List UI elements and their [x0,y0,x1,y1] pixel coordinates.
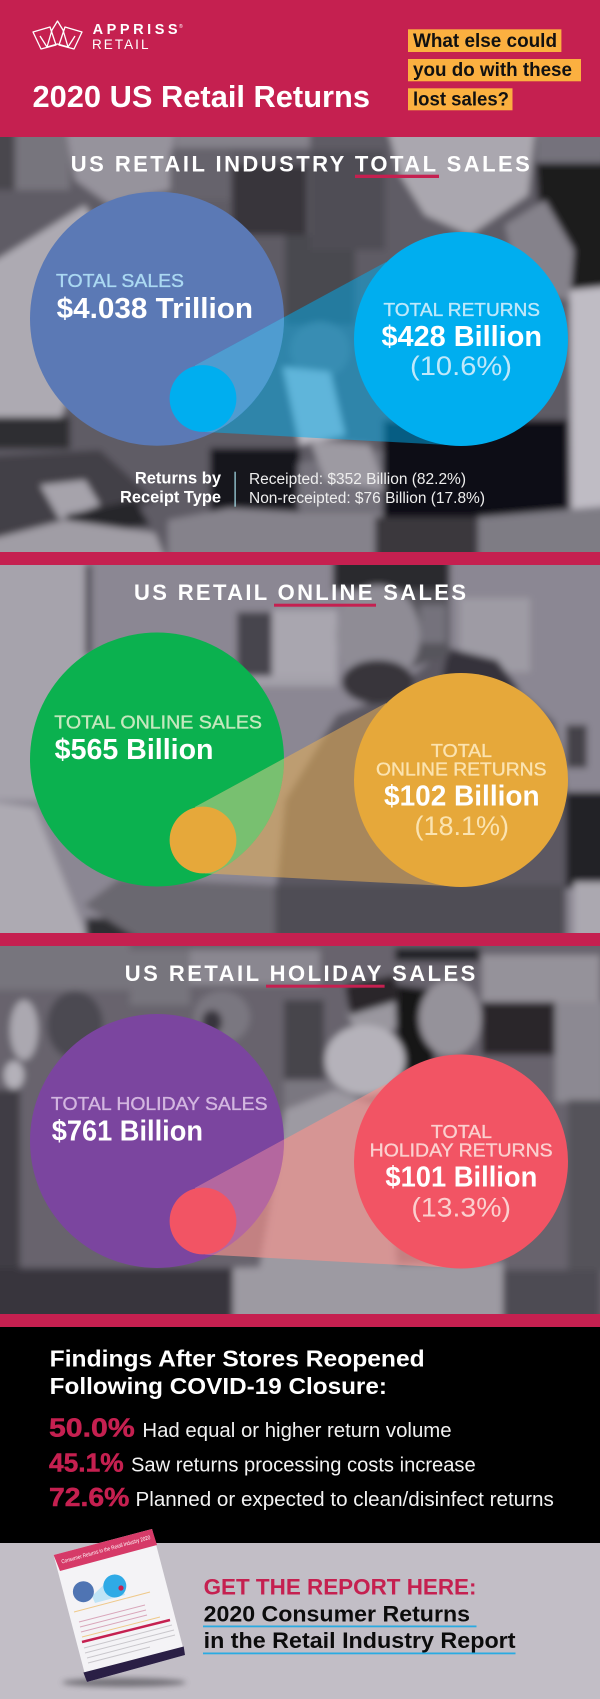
circle: total sales [30,192,284,446]
finding: clean and disinfect: 72.6% [49,1482,129,1512]
panel: get the report [0,1529,600,1699]
icon: report cover: Consumer Returns in the Retail Industry 2020 [61,1535,151,1565]
returns by receipt type: Non-receipted: $76 Billion (17.8%) [249,490,485,507]
icon: report cover [54,1529,186,1687]
call to action: 2020 Consumer Returns [204,1602,470,1627]
finding: clean and disinfect [49,1482,554,1512]
heading: findings: Following COVID-19 Closure: [50,1373,387,1399]
logo: Appriss Retail: ® [179,23,183,30]
finding: processing costs: 45.1% [49,1448,124,1478]
divider band [0,1314,600,1327]
circle: returns share [170,365,236,432]
heading: US RETAIL ONLINE SALES [134,580,466,605]
circle: total returns [354,232,568,446]
finding: clean and disinfect: Planned or expected to clean/disinfect returns [136,1489,554,1511]
header banner [0,0,600,137]
circle: holiday returns share [170,1188,236,1254]
label: total holiday returns: TOTAL [431,1121,492,1142]
label: total online returns: (18.1%) [414,811,509,841]
cone connector [195,703,448,886]
circle: online returns share [170,807,236,873]
circle: total holiday returns [354,1054,568,1268]
heading: US RETAIL HOLIDAY SALES [125,961,475,986]
circle: total holiday sales [30,1014,284,1268]
label: total returns: TOTAL RETURNS [384,299,540,320]
divider band [0,933,600,946]
heading: US RETAIL INDUSTRY TOTAL SALES [71,152,530,176]
call to action: GET THE REPORT HERE: [204,1574,476,1599]
panel: holiday sales [0,930,600,1330]
callout: what else could you do: What else could [413,31,557,52]
panel: total sales [0,120,600,570]
label: total returns: $428 Billion [382,321,542,353]
label: total online returns: $102 Billion [384,781,540,813]
finding: processing costs [49,1448,476,1478]
label: total holiday sales [51,1093,268,1148]
photo background: man at laptop [0,550,600,950]
panel: online sales [0,550,600,950]
title: 2020 US Retail Returns [32,79,370,114]
photo background: cashier scene [0,120,600,570]
finding: return volume: Had equal or higher return volume [142,1420,452,1442]
label: total holiday sales: $761 Billion [52,1116,203,1148]
label: total holiday returns: $101 Billion [385,1162,537,1194]
label: total holiday returns: (13.3%) [411,1193,511,1223]
call to action [203,1574,516,1654]
logo: Appriss Retail: APPRISS [93,22,178,38]
returns by receipt type: Receipt Type [120,489,221,507]
returns by receipt type: Returns by [135,469,222,487]
callout: what else could you do [408,29,581,110]
finding: return volume: 50.0% [49,1413,135,1443]
label: total online returns: TOTAL [431,740,492,761]
panel: findings [0,1327,600,1543]
label: total online sales: $565 Billion [55,734,214,766]
label: total returns: (10.6%) [410,351,512,381]
callout: what else could you do: lost sales? [413,90,509,110]
label: total online sales [54,711,262,766]
finding: return volume [49,1413,452,1443]
circle: total online sales [30,632,284,886]
label: total sales: $4.038 Trillion [57,293,253,325]
label: total returns [382,299,542,381]
photo background: holiday shopper in mask [0,930,600,1330]
finding: processing costs: Saw returns processing costs increase [131,1455,476,1477]
heading: findings [50,1346,425,1399]
callout: what else could you do: you do with these [413,60,572,81]
returns by receipt type [120,469,485,507]
label: total holiday sales: TOTAL HOLIDAY SALES [51,1093,268,1114]
label: total sales: TOTAL SALES [56,270,184,291]
label: total online sales: TOTAL ONLINE SALES [54,711,262,732]
icon: lotus crown [33,21,82,49]
call to action: in the Retail Industry Report [204,1628,516,1653]
cone connector [195,1084,448,1268]
circle: total online returns [354,673,568,887]
label: total sales [56,270,253,325]
returns by receipt type: Receipted: $352 Billion (82.2%) [249,471,466,488]
label: total holiday returns [370,1121,553,1223]
logo: Appriss Retail: RETAIL [92,37,149,52]
divider band [0,552,600,565]
label: total online returns [376,740,546,841]
logo: Appriss Retail [33,21,183,52]
cone connector [195,262,448,445]
label: total holiday returns: HOLIDAY RETURNS [370,1140,553,1161]
heading: findings: Findings After Stores Reopened [50,1346,425,1372]
label: total online returns: ONLINE RETURNS [376,759,546,780]
